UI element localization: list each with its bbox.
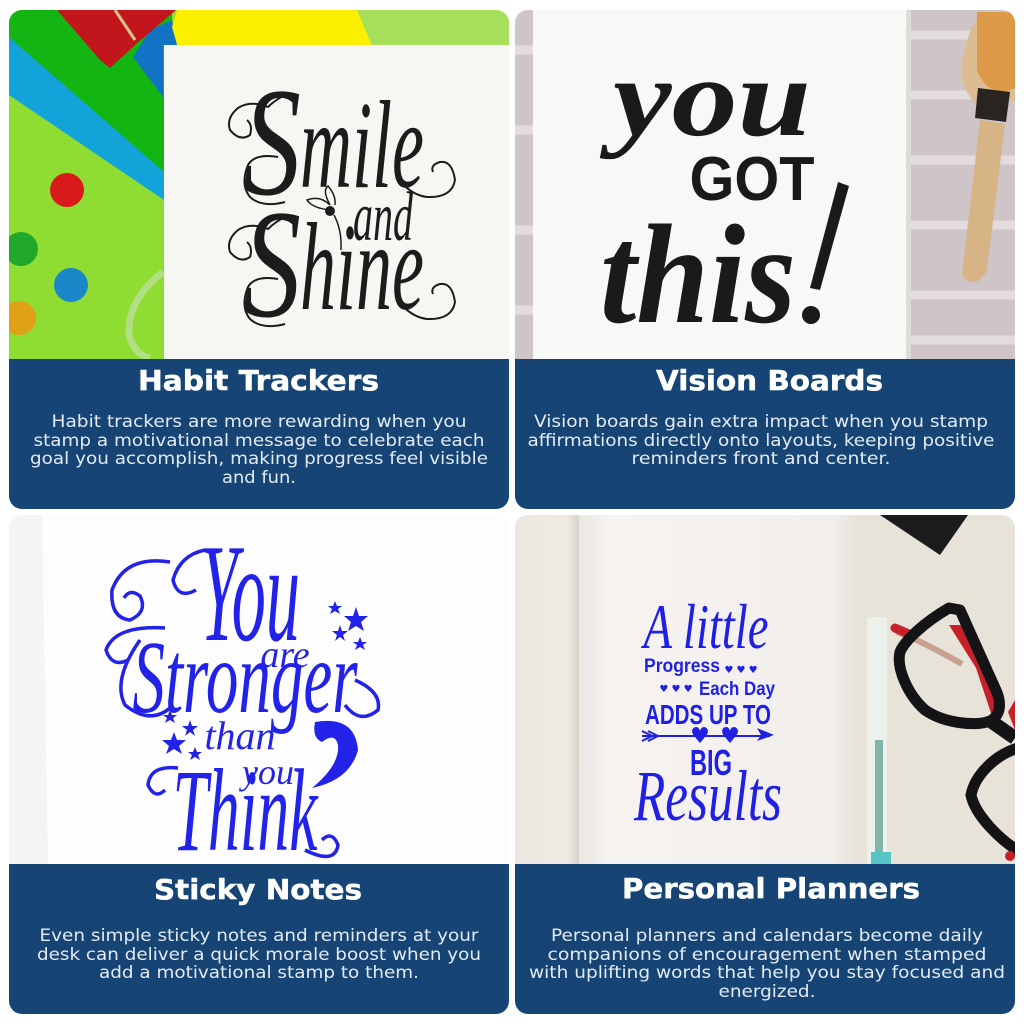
body text: Personal Planners: energized.	[718, 982, 816, 1002]
stamp: A little Progress Each Day adds up to big results: Results	[633, 756, 782, 836]
body text: Vision Boards: affirmations directly onto layouts, keeping positive	[528, 431, 994, 451]
body text: Sticky Notes: desk can deliver a quick morale boost when you	[37, 945, 481, 965]
heading: Vision Boards: Vision Boards	[656, 364, 883, 397]
heading: Personal Planners: Personal Planners	[622, 872, 920, 905]
body text: Habit Trackers: and fun.	[222, 468, 296, 488]
caption bar	[9, 359, 509, 509]
stamp: You got this!: you	[599, 36, 811, 160]
stamp: You are Stronger than you Think: you	[239, 752, 294, 792]
photo: white sticky note	[9, 515, 48, 864]
body text: Personal Planners: with uplifting words that help you stay focused and	[529, 963, 1005, 983]
stamp: A little Progress Each Day adds up to big results: ♥	[690, 724, 710, 749]
stamp: Smile and Shine: S	[243, 178, 301, 350]
stamp: You got this!	[600, 82, 849, 324]
stamp: You are Stronger than you Think: Think	[172, 745, 319, 876]
stamp: A little Progress Each Day adds up to big results: ♥ ♥ ♥	[659, 684, 693, 695]
body text: Sticky Notes	[37, 926, 481, 983]
stamp: A little Progress Each Day adds up to big results: A little	[641, 591, 768, 662]
stamp: You are Stronger than you Think: are	[260, 634, 310, 676]
caption bar	[9, 864, 509, 1014]
panel: vision boards	[515, 10, 1015, 509]
body text: Habit Trackers: stamp a motivational message to celebrate each	[34, 431, 484, 451]
body text: Personal Planners: Personal planners and calendars become daily	[551, 926, 983, 946]
photo: colourful paper and white card	[2, 10, 509, 360]
caption bar	[515, 864, 1015, 1014]
heading: Habit Trackers: Habit Trackers	[138, 364, 379, 397]
stamp: A little Progress Each Day adds up to big results: Each Day	[699, 679, 775, 700]
panel: personal planners	[515, 515, 1020, 1014]
photo: white card on wood with brush	[515, 10, 1015, 360]
body text: Sticky Notes: add a motivational stamp to them.	[99, 963, 419, 983]
stamp: You got this!: GOT	[690, 145, 815, 214]
stamp: A little Progress Each Day adds up to big results: BIG	[690, 742, 732, 783]
body text: Vision Boards: Vision boards gain extra impact when you stamp	[534, 412, 988, 432]
stamp: Smile and Shine: S	[243, 56, 301, 228]
stamp: A little Progress Each Day adds up to big results	[634, 604, 780, 821]
panel: sticky notes	[9, 515, 509, 1014]
stamp: Smile and Shine: and	[353, 179, 414, 256]
body text: Personal Planners: companions of encouragement when stamped	[548, 945, 986, 965]
heading: Sticky Notes: Sticky Notes	[154, 873, 362, 906]
stamp: A little Progress Each Day adds up to big results: Progress	[644, 656, 720, 677]
stamp: A little Progress Each Day adds up to big results: ♥ ♥ ♥	[724, 665, 758, 676]
stamp: You are Stronger than you Think	[104, 548, 380, 858]
body text: Vision Boards	[528, 412, 994, 469]
stamp: You are Stronger than you Think: than	[204, 713, 276, 758]
body text: Vision Boards: reminders front and center.	[632, 449, 890, 469]
stamp: A little Progress Each Day adds up to big results: ♥	[720, 724, 740, 749]
body text: Personal Planners	[529, 926, 1005, 1002]
body text: Habit Trackers	[30, 412, 488, 488]
body text: Habit Trackers: goal you accomplish, making progress feel visible	[30, 449, 488, 469]
photo: notebook, pen and glasses	[515, 515, 1020, 865]
body text: Sticky Notes: Even simple sticky notes and reminders at your	[40, 926, 479, 946]
stamp: You are Stronger than you Think: You	[200, 516, 300, 671]
stamp: Smile and Shine: hine	[300, 199, 424, 337]
caption bar	[515, 359, 1015, 509]
stamp: A little Progress Each Day adds up to big results: ADDS UP TO	[645, 699, 771, 730]
stamp: Smile and Shine	[228, 91, 456, 328]
stamp: Smile and Shine: mile	[300, 77, 424, 215]
body text: Habit Trackers: Habit trackers are more rewarding when you	[52, 412, 466, 432]
stamp: You got this!: this	[600, 195, 796, 353]
stamp: You are Stronger than you Think: Stronger	[132, 620, 358, 735]
panel: habit trackers	[2, 10, 509, 509]
